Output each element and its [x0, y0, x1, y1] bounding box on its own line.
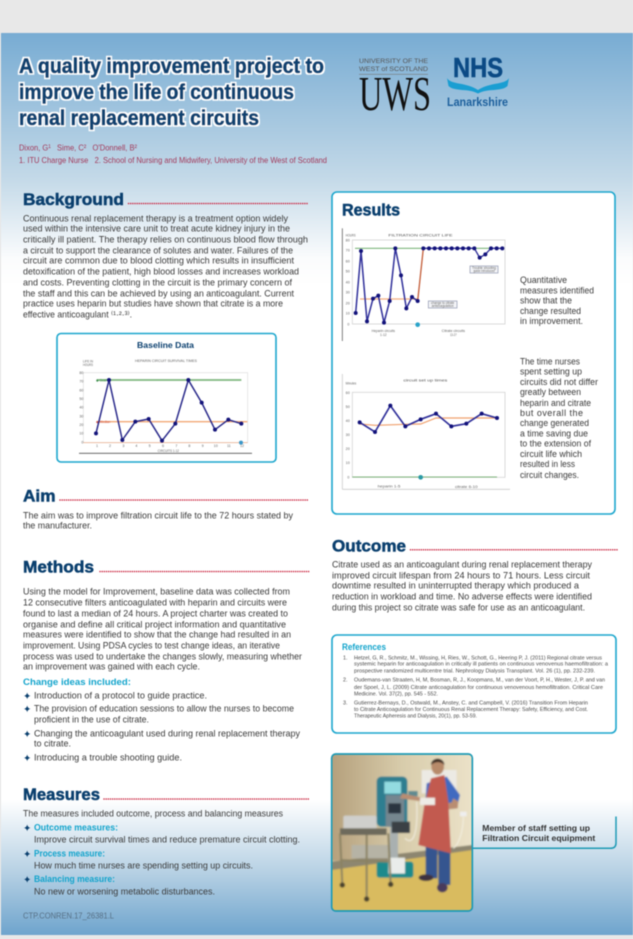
text: methods body: process was used to undertake the changes slowly, measuring whether: [23, 652, 302, 662]
chart: filtration circuit life: change to citrate: [431, 301, 454, 305]
list: change ideas: ✦: [23, 692, 31, 702]
reference list: Therapeutic Apheresis and Dialysis, 20(1), pp. 53-59.: [354, 714, 477, 720]
list: measures: ✦: [23, 875, 31, 886]
chart: heparin circuit survival times: 11: [227, 444, 231, 448]
reference list: Oudemans-van Straaten, H, M, Bosman, R, J., Koopmans, M., van der Voort, P, H., Wester, J, P. and van: [354, 678, 605, 684]
reference list: 1.: [343, 656, 348, 662]
reference list: prospective randomized multicentre trial. Nephrology Dialysis Transplant. Vol. 26 (1), pp. 232-239.: [354, 669, 595, 675]
chart: filtration circuit life: 1-12: [380, 333, 387, 337]
authors and affiliations: Dixon, G¹ Sime, C² O'Donnell, B²: [19, 142, 137, 152]
logo: UWS: [359, 58, 431, 121]
heading: references: References: [342, 642, 386, 652]
text: time nurses spent: spent setting up: [520, 367, 582, 377]
list: change ideas: The provision of education sessions to allow the nurses to become: [34, 704, 294, 714]
heading: Methods: Methods: [23, 559, 94, 577]
text: background body: [23, 214, 308, 320]
chart: filtration circuit life: 13-27: [450, 333, 457, 337]
chart: circuit set up times: 40: [346, 419, 350, 423]
chart: heparin circuit survival times: 40: [79, 406, 83, 410]
text: methods body: found to last a median of 24 hours. A project charter was created to: [23, 609, 288, 619]
chart: filtration circuit life: 10: [346, 312, 350, 316]
list: change ideas: [23, 691, 300, 764]
chart: circuit set up times: heparin 1-5: [378, 485, 400, 489]
text: methods body: improvement. Using PDSA cycles to test change ideas, an iterative: [23, 641, 280, 651]
chart: circuit set up times: citrate 6-10: [455, 485, 478, 489]
panel: baseline data: [57, 334, 276, 462]
text: background body: Continuous renal replacement therapy is a treatment option widely: [23, 214, 288, 224]
logo: NHS Lanarkshire: Lanarkshire: [447, 97, 508, 109]
logo: UWS: UWS: [359, 66, 431, 121]
list: measures: Process measure:: [34, 849, 105, 859]
list: measures: How much time nurses are spending setting up circuits.: [34, 861, 253, 871]
text: time nurses spent: greatly between: [520, 387, 581, 397]
subheading: change ideas: Change ideas included:: [23, 677, 131, 687]
chart: heparin circuit survival times: 4: [135, 444, 137, 448]
callout: photo caption: Member of staff setting up: [482, 824, 590, 833]
text: background body: circuit are common due to blood clotting which results in insufficient: [23, 256, 295, 266]
text: time nurses spent: circuit life which: [520, 449, 582, 459]
heading: baseline data: Baseline Data: [137, 341, 195, 350]
chart: filtration circuit life: [342, 228, 505, 341]
logo: NHS Lanarkshire: [447, 52, 509, 109]
list: measures: [23, 823, 300, 897]
chart: circuit set up times: 60: [346, 391, 350, 395]
chart: filtration circuit life: 80: [346, 238, 350, 242]
chart: filtration circuit life: FILTRATION CIRCUIT LIFE: [388, 232, 453, 237]
list: change ideas: Introducing a trouble shooting guide.: [34, 753, 182, 763]
chart: heparin circuit survival times: 70: [79, 380, 83, 384]
chart: circuit set up times: Minutes: [346, 382, 356, 386]
text: measures intro: The measures included outcome, process and balancing measures: [23, 809, 283, 819]
list: change ideas: Changing the anticoagulant used during renal replacement therapy: [34, 729, 300, 739]
chart: filtration circuit life: Citrate circuits: [442, 329, 465, 333]
text: time nurses spent: [520, 357, 598, 480]
logo: NHS Lanarkshire: NHS: [453, 52, 503, 83]
text: background body: a circuit to support the clearance of solutes and water. Failures of the: [23, 246, 293, 256]
text: methods body: Using the model for Improvement, baseline data was collected from: [23, 586, 290, 596]
chart: heparin circuit survival times: 10: [79, 432, 83, 436]
panel: references: [332, 635, 616, 733]
list: change ideas: to citrate.: [34, 739, 71, 749]
callout: photo caption: [472, 816, 616, 848]
text: time nurses spent: but overall the: [520, 408, 583, 418]
callout: photo caption: Filtration Circuit equipment: [482, 834, 596, 843]
title: [19, 55, 324, 130]
text: time nurses spent: The time nurses: [520, 357, 580, 367]
photo: staff member setting up filtration circuit equipment: [332, 754, 472, 911]
text: quantitative measures: [520, 275, 594, 326]
text: background body: and costs. Preventing clotting in the circuit is the primary concern of: [23, 278, 292, 288]
text: aim body: The aim was to improve filtration circuit life to the 72 hours stated by: [23, 511, 293, 521]
text: background body: detoxification of the patient, high blood losses and increases workload: [23, 267, 299, 277]
chart: filtration circuit life: 60: [346, 259, 350, 263]
chart: heparin circuit survival times: 5: [149, 444, 151, 448]
text: methods body: 12 consecutive filters anticoagulated with heparin and circuits were: [23, 597, 287, 607]
chart: circuit set up times: 10: [346, 461, 350, 465]
text: time nurses spent: heparin and citrate: [520, 398, 591, 408]
chart: filtration circuit life: 70: [346, 249, 350, 253]
text: quantitative measures: change resulted: [520, 306, 581, 316]
chart: heparin circuit survival times: 1: [96, 444, 98, 448]
chart: circuit set up times: 50: [346, 405, 350, 409]
text: quantitative measures: in improvement.: [520, 316, 583, 326]
authors and affiliations: 1. ITU Charge Nurse 2. School of Nursing and Midwifery, University of the West of Scotland: [19, 155, 327, 165]
heading: Outcome: Outcome: [332, 537, 406, 555]
text: quantitative measures: measures identified: [520, 286, 594, 296]
chart: heparin circuit survival times: CIRCUITS 1-12: [158, 449, 179, 453]
chart: filtration circuit life: Heparin circuits: [372, 329, 395, 333]
chart: heparin circuit survival times: 6: [162, 444, 164, 448]
reference list: Medicine. Vol. 37(2), pp. 545 - 552.: [354, 692, 438, 698]
text: quantitative measures: Quantitative: [520, 275, 567, 285]
logo: UWS: WEST of SCOTLAND: [359, 66, 428, 73]
chart: heparin circuit survival times: 9: [202, 444, 204, 448]
text: background body: effective anticoagulant ⁽¹·²·³⁾.: [23, 310, 132, 320]
reference list: der Spoel, J, L. (2009) Citrate anticoagulation for continuous venovenous hemofiltration. Critical Care: [354, 685, 603, 691]
chart: filtration circuit life: 0: [347, 322, 349, 326]
logo: UWS: UNIVERSITY OF THE: [359, 58, 429, 65]
chart: heparin circuit survival times: [79, 359, 252, 453]
reference list: 2.: [343, 678, 348, 684]
chart: filtration circuit life: Trouble shooting: [472, 266, 496, 270]
chart: heparin circuit survival times: 10: [214, 444, 218, 448]
heading: results: Results: [342, 202, 400, 220]
list: change ideas: proficient in the use of citrate.: [34, 715, 149, 725]
panel: results: [332, 192, 615, 514]
chart: heparin circuit survival times: 7: [175, 444, 177, 448]
chart: heparin circuit survival times: 20: [79, 423, 83, 427]
chart: heparin circuit survival times: 0: [81, 440, 83, 444]
reference list: Hetzel, G, R., Schmitz, M., Wissing, H, Ries, W., Schott, G., Heering P, J. (2011) Regional citrate versus: [354, 656, 602, 662]
chart: filtration circuit life: 20: [346, 301, 350, 305]
text: methods body: an improvement was gained with each cycle.: [23, 662, 200, 672]
text: outcome body: downtime resulted in uninterrupted therapy which produced a: [332, 581, 579, 591]
text: background body: the staff and this can be achieved by using an anticoagulant. Current: [23, 288, 294, 298]
list: measures: ✦: [23, 824, 31, 834]
list: change ideas: Introduction of a protocol to guide practice.: [34, 691, 207, 701]
chart: circuit set up times: circuit set up times: [403, 377, 447, 382]
reference list: 3.: [343, 700, 348, 706]
authors and affiliations: [19, 142, 327, 165]
chart: circuit set up times: 0: [347, 475, 349, 479]
title: A quality improvement project to: [19, 55, 324, 78]
text: outcome body: [332, 560, 592, 613]
chart: heparin circuit survival times: 12: [240, 444, 244, 448]
reference list: to Citrate Anticoagulation for Continuous Renal Replacement Therapy: Safety, Efficiency, and Cost.: [354, 707, 588, 713]
text: time nurses spent: circuit changes.: [520, 470, 579, 480]
chart: filtration circuit life: guide introduced: [473, 269, 495, 273]
chart: filtration circuit life: anticoagulation: [432, 304, 454, 308]
chart: filtration circuit life: 50: [346, 270, 350, 274]
reference list: Gutierrez-Bernays, D., Ostwald, M., Anstey, C. and Campbell, V. (2016) Transition From Heparin: [354, 700, 588, 706]
reference list: [343, 656, 608, 720]
text: aim body: the manufacturer.: [23, 521, 92, 531]
list: change ideas: ✦: [23, 730, 31, 740]
text: background body: used within the intensive care unit to treat acute kidney injury in the: [23, 224, 290, 234]
list: measures: No new or worsening metabolic disturbances.: [34, 887, 215, 897]
chart: circuit set up times: 30: [346, 433, 350, 437]
title: renal replacement circuits: [19, 107, 259, 130]
text: outcome body: during this project so citrate was safe for use as an anticoagulant.: [332, 603, 585, 613]
chart: filtration circuit life: 40: [346, 280, 350, 284]
heading: Aim: Aim: [23, 488, 56, 506]
chart: heparin circuit survival times: HOURS: [83, 363, 93, 367]
text: background body: practice uses heparin but studies have shown that citrate is a more: [23, 299, 283, 309]
chart: heparin circuit survival times: 80: [79, 371, 83, 375]
list: change ideas: ✦: [23, 704, 31, 716]
text: background body: critically ill patient. The therapy relies on continuous blood flow through: [23, 235, 308, 245]
text: methods body: [23, 586, 302, 672]
chart: heparin circuit survival times: ◆ Goal: [96, 378, 107, 382]
chart: filtration circuit life: 30: [346, 291, 350, 295]
chart: heparin circuit survival times: 3: [122, 444, 124, 448]
text: methods body: organise and define all critical project information and quantitative: [23, 620, 286, 630]
text: outcome body: reduction in workload and time. No adverse effects were identified: [332, 592, 592, 602]
chart: filtration circuit life: HOURS: [346, 234, 356, 238]
list: measures: ✦: [23, 850, 31, 860]
chart: heparin circuit survival times: 8: [188, 444, 190, 448]
list: measures: Balancing measure:: [34, 874, 115, 884]
heading: Measures: Measures: [23, 786, 100, 804]
chart: heparin circuit survival times: 60: [79, 388, 83, 392]
text: time nurses spent: circuits did not differ: [520, 377, 598, 387]
chart: heparin circuit survival times: LIFE IN: [83, 359, 93, 363]
text: aim body: [23, 511, 293, 531]
chart: heparin circuit survival times: ◆ Median: [96, 420, 111, 424]
text: time nurses spent: change generated: [520, 418, 589, 428]
text: time nurses spent: a time saving due: [520, 428, 588, 438]
chart: circuit set up times: [342, 374, 510, 489]
text: time nurses spent: to the extension of: [520, 439, 591, 449]
chart: heparin circuit survival times: 2: [109, 444, 111, 448]
chart: circuit set up times: 20: [346, 447, 350, 451]
heading: Background: Background: [23, 191, 124, 209]
reference list: systemic heparin for anticoagulation in critically ill patients on continuous venovenus haemofiltration: a: [354, 662, 608, 668]
list: change ideas: ✦: [23, 754, 31, 764]
text: time nurses spent: resulted in less: [520, 459, 575, 469]
text: outcome body: Citrate used as an anticoagulant during renal replacement therapy: [332, 560, 592, 570]
text: outcome body: improved circuit lifespan from 24 hours to 71 hours. Less circuit: [332, 570, 590, 580]
title: improve the life of continuous: [19, 81, 294, 104]
chart: heparin circuit survival times: HEPARIN CIRCUIT SURVIVAL TIMES: [135, 359, 198, 363]
chart: heparin circuit survival times: 50: [79, 397, 83, 401]
text: methods body: measures were identified to show that the change had resulted in an: [23, 630, 291, 640]
list: measures: Outcome measures:: [34, 823, 118, 833]
list: measures: Improve circuit survival times and reduce premature circuit clotting.: [34, 835, 300, 845]
chart: heparin circuit survival times: 30: [79, 414, 83, 418]
footer code: CTP.CONREN.17_26381.L: [23, 912, 115, 921]
text: quantitative measures: show that the: [520, 296, 572, 306]
